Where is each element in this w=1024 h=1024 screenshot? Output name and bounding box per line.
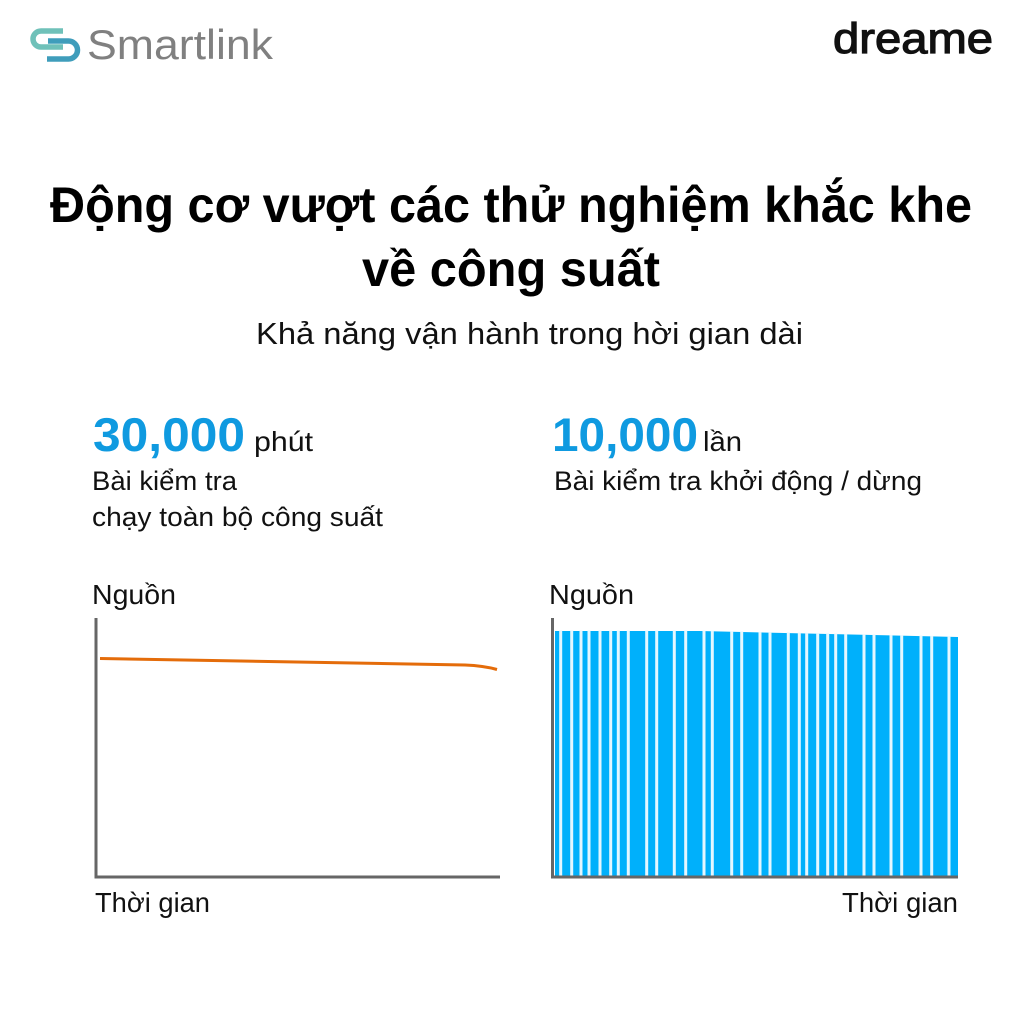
power curve — [100, 658, 497, 670]
title — [50, 177, 972, 297]
stat: 10,000 cycles: lần — [703, 426, 742, 457]
stat: 30,000 minutes: 30,000 — [93, 408, 245, 461]
axis label: time: Thời gian — [95, 887, 210, 918]
wordmark: Smartlink: Smartlink — [87, 21, 274, 68]
stat: 30,000 minutes: phút — [254, 426, 313, 457]
stat: 10,000 cycles — [552, 408, 922, 496]
axis label: power: Nguồn — [549, 579, 634, 610]
subtitle: Khả năng vận hành trong hời gian dài — [256, 316, 803, 351]
stat: 30,000 minutes: chạy toàn bộ công suất — [92, 502, 384, 532]
bars — [555, 631, 958, 876]
stat: 30,000 minutes — [92, 408, 384, 532]
stat: 10,000 cycles: 10,000 — [552, 408, 698, 461]
logo: Smartlink — [33, 21, 274, 68]
title: về công suất — [362, 241, 660, 297]
white mask above bars — [556, 624, 960, 636]
stat: 30,000 minutes: Bài kiểm tra — [92, 466, 238, 496]
axis label: power: Nguồn — [92, 579, 176, 610]
chart axes — [96, 618, 500, 877]
stat: 10,000 cycles: Bài kiểm tra khởi động / dừng — [554, 466, 922, 496]
title: Động cơ vượt các thử nghiệm khắc khe — [50, 177, 972, 233]
axis label: time: Thời gian — [842, 887, 958, 918]
logo: dreame: dreame — [833, 15, 993, 63]
chart: start/stop bars — [549, 579, 960, 918]
icon: chain link — [33, 31, 78, 59]
chart: continuous power line — [92, 579, 500, 918]
chart axes — [552, 618, 958, 877]
bar gaps — [561, 625, 949, 876]
